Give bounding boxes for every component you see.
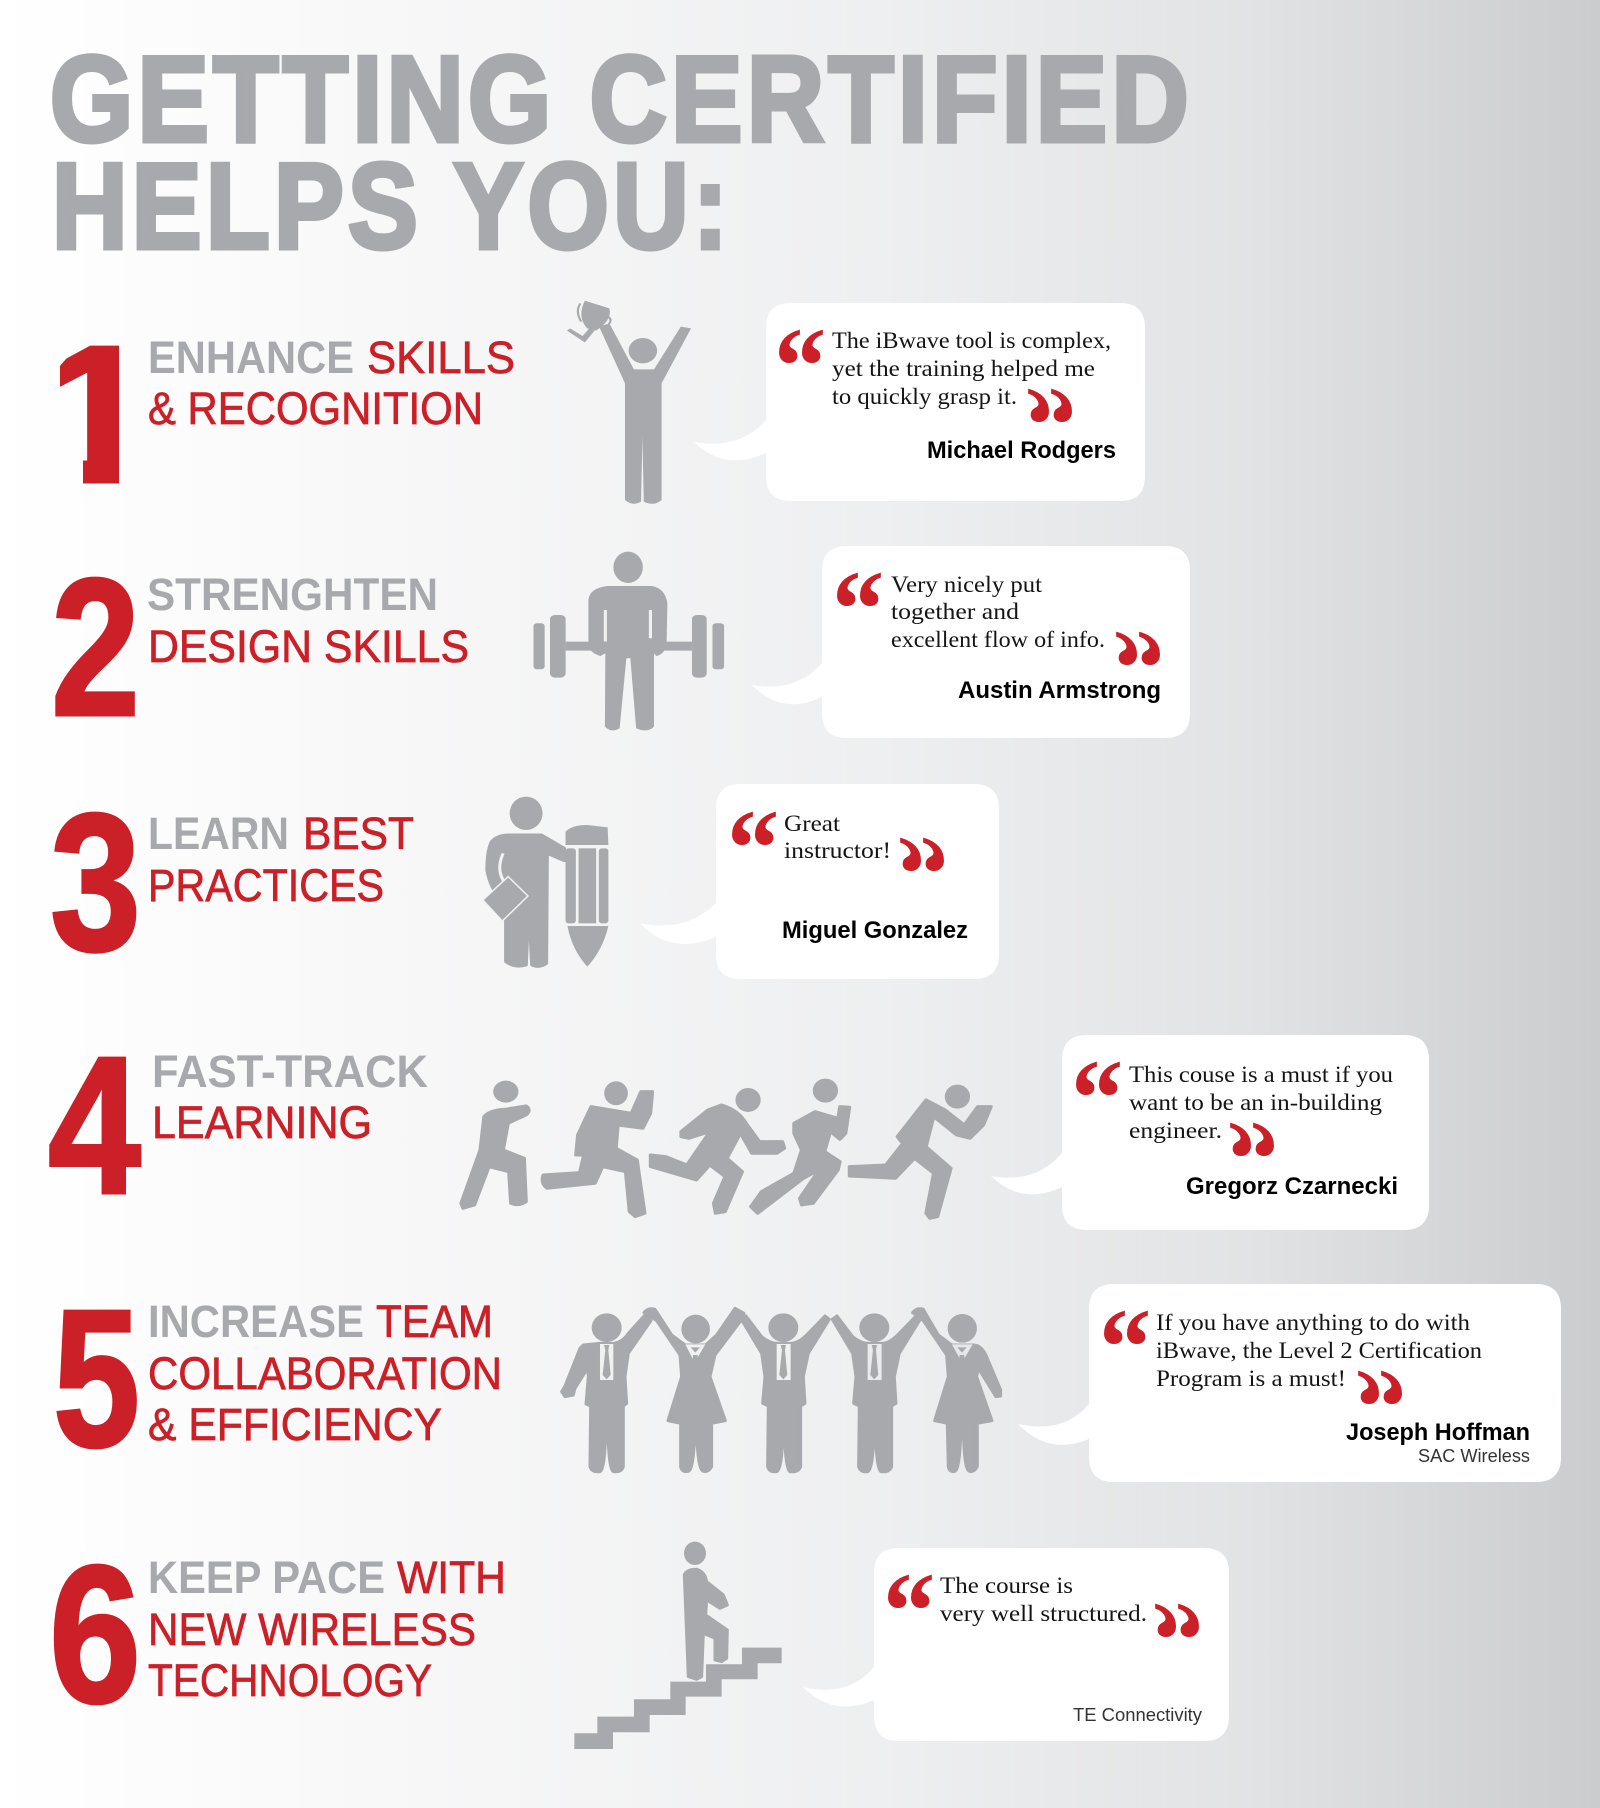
- quote 3: “: [897, 814, 949, 936]
- quote 5: [1099, 1287, 1530, 1469]
- heading 3: PRACTICES: [148, 860, 384, 911]
- quote 5: “: [1099, 1287, 1151, 1409]
- runner 1: [461, 1081, 529, 1208]
- quote 2: Very nicely put: [891, 572, 1043, 597]
- speech bubble 5: [1018, 1284, 1561, 1482]
- quote 3: instructor!: [784, 838, 891, 863]
- quote 5: iBwave, the Level 2 Certification: [1156, 1338, 1483, 1363]
- heading 6: NEW WIRELESS: [148, 1604, 476, 1655]
- quote 3: Miguel Gonzalez: [782, 917, 968, 944]
- heading 5: & EFFICIENCY: [148, 1399, 442, 1450]
- quote 5: SAC Wireless: [1418, 1446, 1530, 1466]
- number 1: 1: [34, 305, 165, 524]
- quote 1: yet the training helped me: [832, 356, 1095, 381]
- quote 2: excellent flow of info.: [891, 627, 1105, 652]
- heading 2: DESIGN SKILLS: [148, 621, 469, 672]
- quote 2: “: [832, 549, 884, 671]
- heading 5: [148, 1296, 502, 1450]
- number 6: 6: [49, 1525, 141, 1744]
- quote 3: [727, 788, 968, 944]
- quote 6: The course is: [940, 1573, 1073, 1598]
- speech bubble 6: [803, 1548, 1229, 1741]
- quote 2: together and: [891, 599, 1020, 624]
- heading 1: & RECOGNITION: [148, 383, 483, 434]
- runner 3: [650, 1088, 784, 1213]
- quote 4: This couse is a must if you: [1129, 1062, 1394, 1087]
- heading 1: SKILLS: [367, 332, 515, 383]
- quote 1: [774, 306, 1116, 487]
- quote 4: [1071, 1038, 1398, 1221]
- title: [50, 31, 1193, 274]
- icon: person raising trophy: [567, 301, 691, 504]
- row 4: fast-track learning: [48, 1016, 1429, 1235]
- runner 5: [849, 1085, 991, 1218]
- heading 5: INCREASE: [148, 1296, 364, 1347]
- heading 6: [148, 1552, 506, 1706]
- quote 2: [832, 549, 1165, 730]
- row 1: enhance skills and recognition: [60, 300, 1145, 504]
- row 5: increase team collaboration and efficiency: [53, 1269, 1561, 1488]
- heading 1: [148, 332, 515, 434]
- quote 6: “: [1152, 1580, 1204, 1702]
- quote 6: “: [883, 1551, 935, 1673]
- heading 4: FAST-TRACK: [152, 1046, 428, 1097]
- heading 1: ENHANCE: [148, 332, 354, 383]
- quote 5: Joseph Hoffman: [1346, 1419, 1530, 1446]
- quote 4: “: [1071, 1038, 1123, 1160]
- quote 6: [883, 1551, 1204, 1725]
- runner 4: [751, 1079, 849, 1213]
- row 6: keep pace with new wireless technology: [49, 1525, 1229, 1749]
- quote 5: Program is a must!: [1156, 1366, 1346, 1391]
- speech bubble 2: [752, 546, 1190, 738]
- speech bubble 3: [640, 784, 999, 979]
- woman 5: [913, 1309, 1001, 1472]
- speech bubble 1: [694, 303, 1145, 501]
- quote 1: The iBwave tool is complex,: [832, 328, 1111, 353]
- heading 4: LEARNING: [152, 1097, 372, 1148]
- number 4: 4: [48, 1016, 141, 1235]
- icon: team holding hands: [562, 1308, 1001, 1472]
- quote 4: Gregorz Czarnecki: [1186, 1173, 1398, 1200]
- number 3: 3: [50, 773, 141, 992]
- heading 6: KEEP PACE: [148, 1552, 385, 1603]
- quote 2: Austin Armstrong: [958, 677, 1161, 704]
- quote 6: very well structured.: [940, 1601, 1147, 1626]
- quote 1: “: [1025, 365, 1077, 487]
- quote 5: “: [1355, 1347, 1407, 1469]
- heading 5: COLLABORATION: [148, 1348, 502, 1399]
- icon: person climbing stairs: [574, 1542, 782, 1749]
- title: GETTING CERTIFIED: [50, 31, 1193, 167]
- man 3: [741, 1313, 829, 1472]
- icon: person lifting barbell: [533, 552, 724, 730]
- quote 1: “: [774, 306, 826, 428]
- quote 1: Michael Rodgers: [927, 437, 1116, 464]
- quote 4: want to be an in-building: [1129, 1090, 1383, 1115]
- runner 2: [542, 1081, 652, 1217]
- woman 2: [644, 1308, 744, 1472]
- quote 5: If you have anything to do with: [1156, 1310, 1471, 1335]
- heading 5: TEAM: [376, 1296, 493, 1347]
- quote 4: engineer.: [1129, 1118, 1222, 1143]
- number 2: 2: [51, 538, 140, 757]
- icon: five running people: [461, 1079, 991, 1218]
- speech bubble 4: [991, 1035, 1429, 1230]
- heading 4: [152, 1046, 428, 1148]
- icon: person with giant pencil: [483, 797, 608, 967]
- man 1: [562, 1313, 651, 1472]
- title: HELPS YOU:: [52, 138, 732, 274]
- row 3: learn best practices: [50, 773, 999, 992]
- quote 2: “: [1113, 608, 1165, 730]
- heading 6: TECHNOLOGY: [148, 1655, 432, 1706]
- number 5: 5: [53, 1269, 140, 1488]
- quote 1: to quickly grasp it.: [832, 384, 1017, 409]
- quote 6: TE Connectivity: [1073, 1705, 1202, 1725]
- heading 3: BEST: [303, 808, 414, 859]
- man 4: [832, 1313, 920, 1472]
- heading 3: [148, 808, 414, 911]
- heading 3: LEARN: [148, 808, 289, 859]
- row 2: strengthen design skills: [51, 538, 1190, 757]
- heading 2: [147, 569, 469, 672]
- heading 2: STRENGHTEN: [147, 569, 438, 620]
- quote 3: “: [727, 788, 779, 910]
- heading 6: WITH: [397, 1552, 506, 1603]
- quote 4: “: [1227, 1099, 1279, 1221]
- quote 3: Great: [784, 811, 841, 836]
